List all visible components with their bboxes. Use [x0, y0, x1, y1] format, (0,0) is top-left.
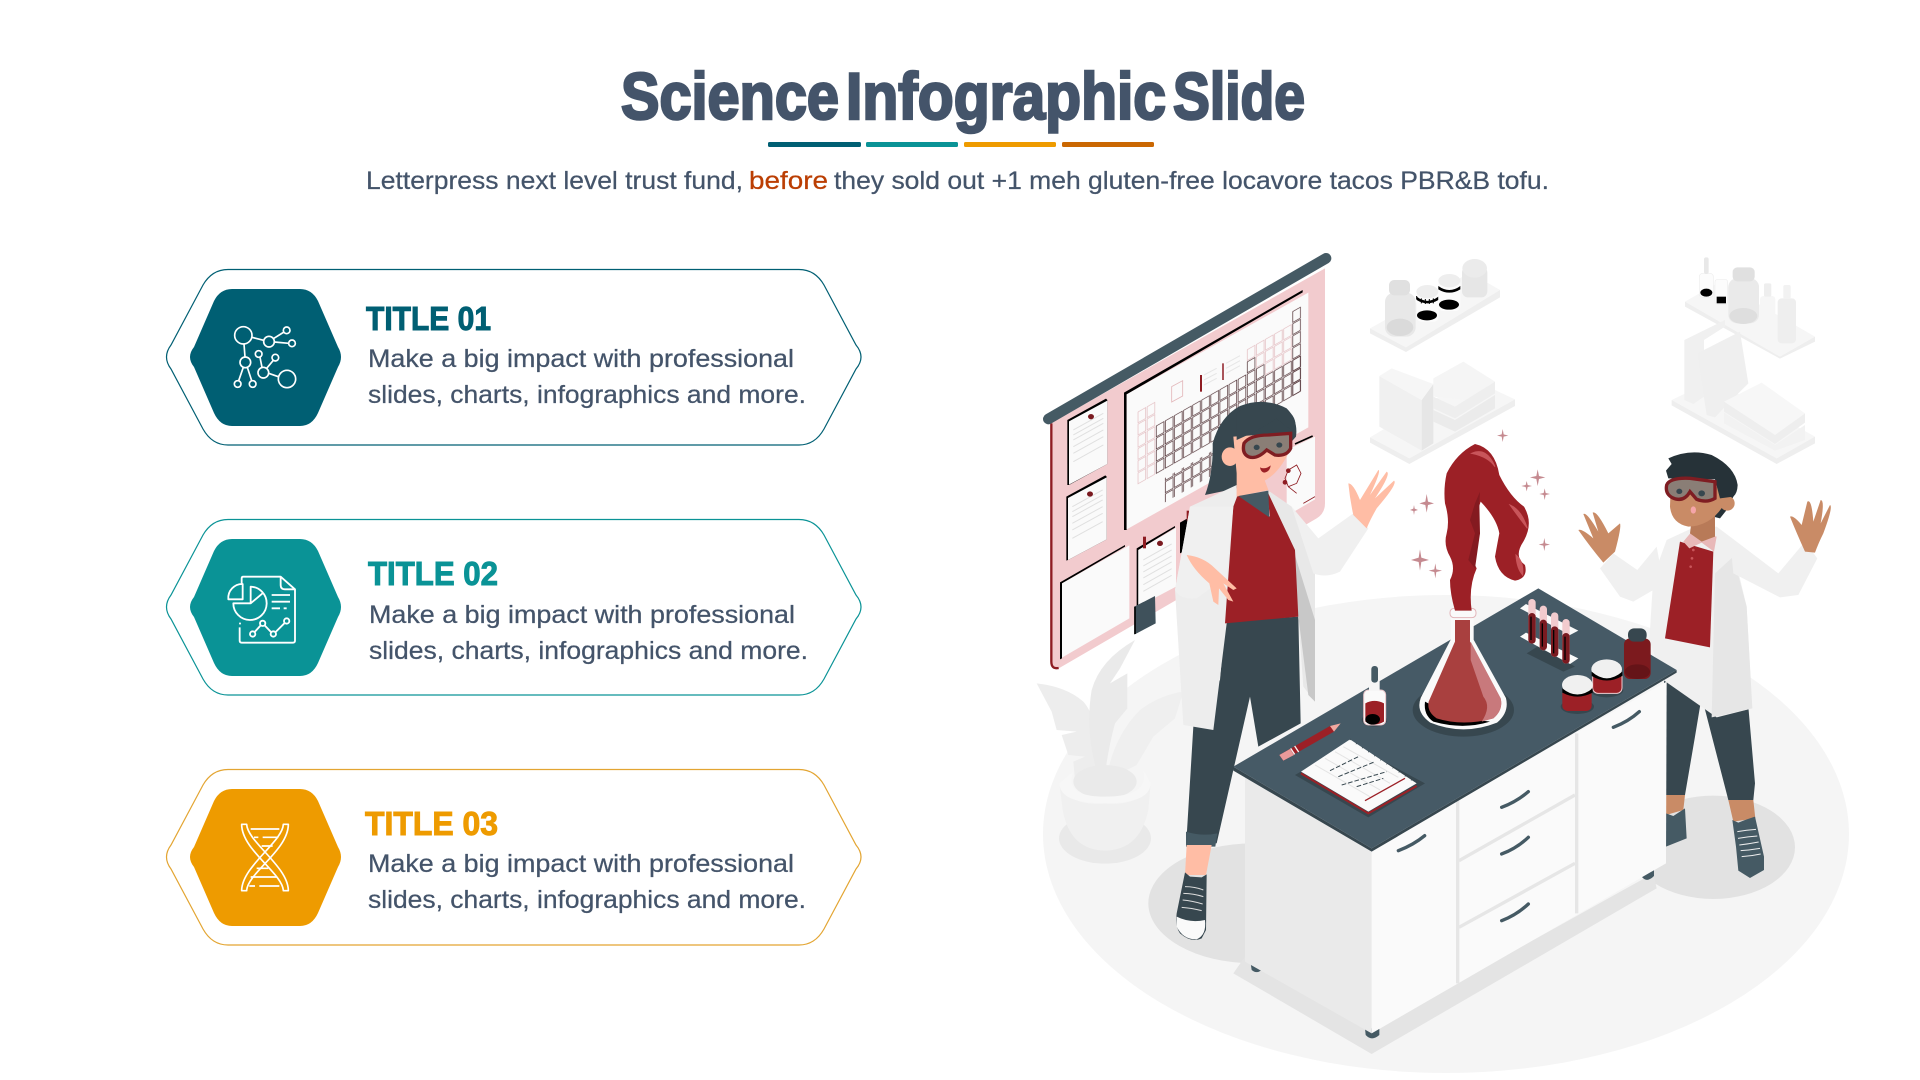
- black clip: [1134, 596, 1156, 635]
- plant centre leaf: [1089, 640, 1135, 790]
- counter top: [1233, 588, 1677, 848]
- counter: [1233, 588, 1677, 1054]
- body text 01: Make a big impact with professional: [368, 345, 794, 373]
- document bottom centre: [1137, 511, 1193, 608]
- canister: [1462, 259, 1487, 297]
- flask shadow: [1413, 683, 1514, 737]
- body text 02: Make a big impact with professional: [369, 601, 795, 629]
- woman right sleeve: [1292, 507, 1368, 575]
- woman ankle: [1185, 845, 1212, 875]
- subtitle: Letterpress next level trust fund,: [366, 167, 743, 195]
- dropper bottle on counter: [1362, 666, 1387, 727]
- woman: [1175, 402, 1395, 940]
- shelf: jars: [1370, 259, 1500, 352]
- card outline 01: [166, 270, 861, 445]
- stacked books: [1433, 362, 1495, 432]
- plant left leaf: [1037, 683, 1105, 790]
- icon: dna helix: [242, 824, 288, 891]
- flask inner dark base: [1425, 702, 1490, 726]
- body text 02: [369, 601, 808, 665]
- dropper bottle: [1699, 257, 1713, 297]
- woman collar: [1238, 491, 1269, 517]
- man goggles: [1666, 478, 1715, 501]
- subtitle: [366, 167, 1549, 195]
- subtitle: they sold out +1 meh gluten-free locavore tacos PBR&B tofu.: [834, 167, 1549, 195]
- board rod: [1048, 258, 1326, 419]
- sheet bottom left: [1060, 545, 1129, 659]
- body text 01: slides, charts, infographics and more.: [368, 381, 806, 409]
- man shoes: [1666, 808, 1764, 878]
- man left sleeve: [1600, 547, 1662, 602]
- small jar one: [1416, 285, 1439, 322]
- document top left: [1067, 399, 1107, 485]
- man coat: [1649, 527, 1752, 717]
- shelf: books: [1370, 362, 1515, 464]
- pencil: [1279, 723, 1341, 761]
- counter top edge: [1233, 670, 1677, 852]
- body text 01: [368, 345, 806, 409]
- woman left hand: [1187, 555, 1237, 605]
- notebook: [1295, 739, 1425, 817]
- woman shoe: [1176, 872, 1207, 940]
- document middle left: [1066, 475, 1107, 561]
- woman cuff: [1186, 832, 1217, 847]
- woman shirt: [1225, 490, 1298, 623]
- man hair: [1666, 452, 1738, 498]
- body text 03: slides, charts, infographics and more.: [368, 886, 806, 914]
- wide jar: [1728, 267, 1759, 324]
- flask glass: [1420, 615, 1506, 728]
- woman trousers: [1187, 617, 1301, 843]
- card outline 02: [166, 520, 861, 695]
- title underline bars: [768, 142, 1154, 147]
- woman coat back: [1175, 485, 1237, 730]
- right panel with molecule: [1283, 436, 1315, 516]
- panel: title 03: [166, 770, 861, 945]
- man left hand: [1578, 512, 1620, 563]
- man face: [1670, 487, 1723, 527]
- woman mouth: [1260, 465, 1271, 473]
- periodic table cells: [1137, 306, 1301, 518]
- title: Infographic: [846, 59, 1166, 133]
- icon: report document: [228, 577, 295, 643]
- lidded jars: [1561, 659, 1623, 714]
- ampoule: [1715, 279, 1728, 304]
- board dark edge: [1051, 423, 1059, 668]
- woman face: [1233, 433, 1291, 483]
- icon hexagon 02: [190, 539, 341, 676]
- man: [1578, 452, 1831, 878]
- flask highlight: [1471, 642, 1501, 722]
- smoke: [1444, 444, 1529, 611]
- sparkles: [1410, 429, 1550, 578]
- woman coat right: [1265, 488, 1315, 702]
- card outline 03: [166, 770, 861, 945]
- subtitle: before: [749, 167, 828, 195]
- panel: title 02: [166, 520, 861, 695]
- tall bottles: [1760, 283, 1796, 343]
- title: Science: [621, 59, 839, 133]
- man shirt: [1665, 542, 1713, 647]
- dark red jar: [1624, 628, 1651, 679]
- man floor shadow: [1632, 796, 1795, 899]
- title: [621, 59, 1305, 133]
- periodic table panel: [1124, 290, 1308, 530]
- floor ellipse: [1043, 595, 1849, 1073]
- counter right face: [1372, 682, 1667, 1033]
- plant right leaf: [1105, 692, 1183, 790]
- small jar two: [1438, 274, 1460, 311]
- icon hexagon 01: [190, 289, 341, 426]
- man laces: [1737, 829, 1761, 857]
- heading 02: TITLE 02: [368, 555, 498, 592]
- man collar: [1683, 532, 1717, 552]
- illustration: laboratory scene: [1037, 257, 1849, 1073]
- woman hair: [1205, 402, 1296, 495]
- man buttons: [1689, 549, 1695, 568]
- counter handles: [1398, 712, 1639, 921]
- woman goggles: [1243, 433, 1291, 457]
- body text 03: Make a big impact with professional: [368, 850, 794, 878]
- panel: title 01: [166, 270, 861, 445]
- board backing: [1051, 268, 1325, 669]
- poster board: [1048, 258, 1326, 669]
- heading 01: TITLE 01: [366, 300, 491, 337]
- counter panel lines: [1458, 733, 1577, 983]
- man hair back: [1713, 487, 1735, 518]
- periodic legend marks: [1172, 356, 1240, 402]
- icon hexagon 03: [190, 789, 341, 926]
- man ear: [1720, 496, 1735, 511]
- shelf: bottles: [1685, 257, 1815, 359]
- man right hand: [1790, 500, 1831, 553]
- counter left face: [1245, 777, 1372, 1033]
- flask rim: [1450, 608, 1476, 618]
- man neck: [1690, 515, 1715, 542]
- flask liquid: [1428, 620, 1501, 722]
- man mouth: [1691, 506, 1696, 514]
- man right sleeve: [1730, 537, 1817, 597]
- woman neck: [1237, 473, 1268, 497]
- man trousers: [1663, 637, 1755, 800]
- body text 03: [368, 850, 806, 914]
- test tube rack: [1520, 603, 1578, 672]
- upright books: [1379, 368, 1433, 451]
- flask: [1413, 608, 1514, 737]
- woman floor shadow: [1148, 843, 1358, 963]
- body text 02: slides, charts, infographics and more.: [369, 637, 808, 665]
- counter shadow: [1233, 873, 1657, 1054]
- woman right hand: [1348, 470, 1395, 528]
- counter legs: [1251, 870, 1654, 1038]
- plant: [1037, 640, 1183, 864]
- icon: molecule network: [234, 327, 296, 388]
- title: Slide: [1173, 59, 1305, 133]
- plant pot: [1073, 765, 1137, 798]
- woman ear: [1222, 447, 1238, 466]
- woman fringe: [1237, 405, 1296, 440]
- woman left sleeve: [1175, 507, 1233, 599]
- heading 03: TITLE 03: [365, 805, 498, 842]
- shelf: leaning books: [1672, 320, 1815, 464]
- man ankles: [1666, 795, 1755, 822]
- large jar: [1385, 280, 1416, 337]
